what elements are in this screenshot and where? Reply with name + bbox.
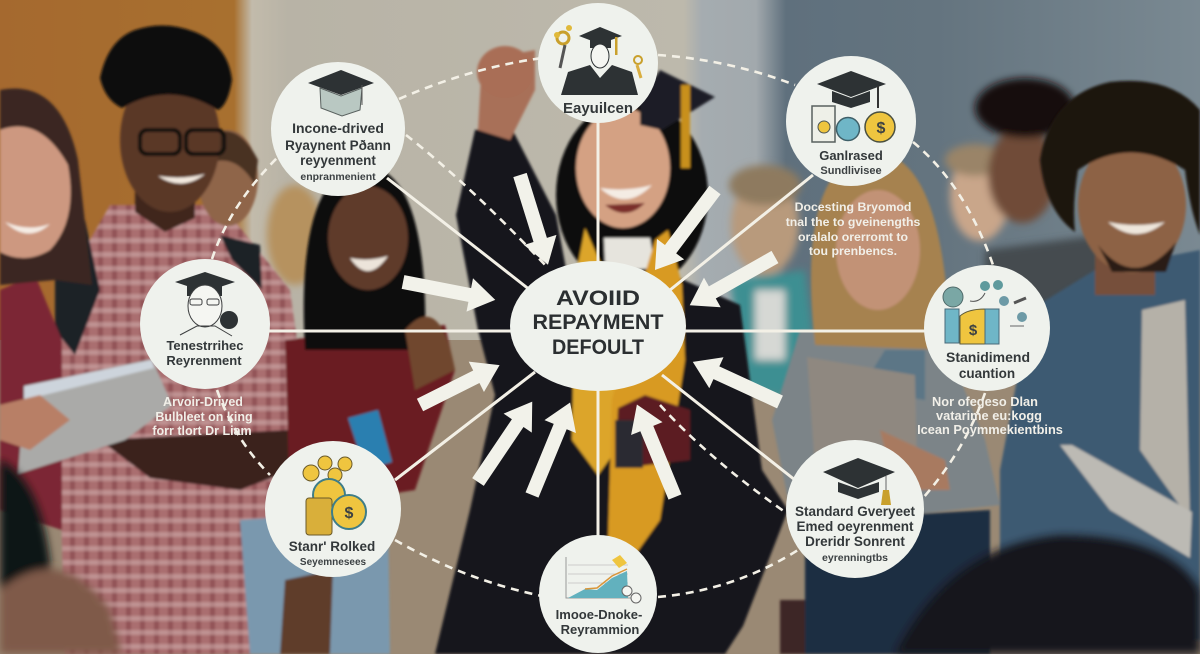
hub: avoid repayment default (510, 261, 686, 391)
node: bottom right: Dreridr Sonrent (805, 534, 905, 549)
hub: avoid repayment default: REPAYMENT (532, 311, 664, 334)
woman on left in maroon shirt (0, 88, 92, 530)
woman in centre left (240, 165, 455, 654)
overlay text: right lower: Icean Poymmekientbins (917, 422, 1063, 437)
overlay text: right upper: Docesting Bryomod (795, 200, 911, 214)
node: bottom right: Standard Gveryeet (795, 504, 916, 519)
arrow 3 (681, 242, 783, 320)
arrow 6 (464, 392, 546, 492)
node: top left (271, 62, 405, 196)
overlay text: right upper: tou prenbencs. (809, 244, 897, 258)
overlay text: left lower: forr tlort Dr Liam (152, 424, 252, 438)
node: top left: enpranmenient (300, 171, 376, 183)
overlay text: right upper: tnal the to gveinengths (786, 215, 920, 229)
arrow 9 (686, 346, 787, 417)
node: top: Eayuilcen (563, 100, 633, 117)
node: top right: Sundlivisee (820, 165, 882, 177)
icon: coin stacks: $ (345, 505, 354, 522)
node: bottom left: Stanr' Rolked (289, 539, 375, 554)
node: bottom left (265, 441, 401, 577)
node: top left: Ryaynent Pðann (285, 138, 391, 153)
arrow 8 (621, 398, 691, 503)
node: bottom right: Emed oeyrenment (796, 519, 914, 534)
overlay text: right upper (786, 200, 920, 258)
arrow 4 (400, 265, 499, 317)
node: top right: Ganlrased (819, 148, 883, 163)
node: right (924, 265, 1050, 391)
background figures: blurred students behind (267, 78, 1110, 400)
overlay text: right lower: vatarime eu:kogg (936, 408, 1042, 423)
right man in denim jacket (1000, 81, 1200, 640)
overlay text: left lower (152, 395, 253, 438)
node: bottom left: Seyemnesees (300, 557, 367, 568)
icon: cap over book (308, 70, 374, 116)
overlay text: right lower (917, 394, 1063, 437)
arrow 1 (504, 170, 564, 270)
man in plaid shirt (55, 25, 308, 654)
node: right: cuantion (959, 366, 1015, 381)
arrow 5 (412, 350, 507, 420)
bottom foreground blurred heads (0, 460, 1200, 654)
node: left (140, 259, 270, 389)
node: bottom: Reyrammion (561, 622, 639, 637)
node: top left: Incone-drived (292, 120, 384, 136)
right woman with tablet (772, 152, 1000, 654)
icon: growth chart (566, 555, 641, 603)
node: bottom (539, 535, 657, 653)
hub: avoid repayment default: AVOIID (556, 287, 640, 310)
node: top (538, 3, 658, 123)
icon: cap, planner, coins: $ (877, 120, 886, 137)
dashed connector ring (212, 55, 993, 597)
notebook on left (0, 359, 172, 474)
node: left: Tenestrrihec (166, 338, 244, 353)
hub: avoid repayment default: DEFOULT (552, 336, 644, 359)
arrows pointing to the hub (400, 170, 787, 503)
solid spokes to the hub (268, 120, 926, 538)
arrow 7 (516, 396, 586, 501)
icon: graduate with coins (554, 25, 642, 95)
node: bottom: Imooe-Dnoke- (556, 607, 642, 622)
overlay text: right upper: oralalo orerromt to (798, 230, 908, 244)
graduate in the centre (435, 46, 788, 654)
overlay text: right lower: Nor ofegeso Dlan (932, 394, 1038, 409)
icon: cap with tassel (823, 458, 895, 505)
node: bottom right: eyrenningtbs (822, 552, 888, 564)
overlay text: left lower: Bulbleet on king (155, 410, 253, 424)
node: top left: reyyenment (300, 153, 376, 168)
icon: graduate with glasses (175, 272, 238, 336)
node: top right (786, 56, 916, 186)
arrow 2 (641, 180, 729, 280)
node: bottom right (786, 440, 924, 578)
icon: savings and finance: $ (969, 322, 978, 339)
overlay text: left lower: Arvoir-Drived (163, 395, 243, 409)
node: right: Stanidimend (946, 349, 1030, 365)
node: left: Reyrenment (166, 353, 242, 368)
